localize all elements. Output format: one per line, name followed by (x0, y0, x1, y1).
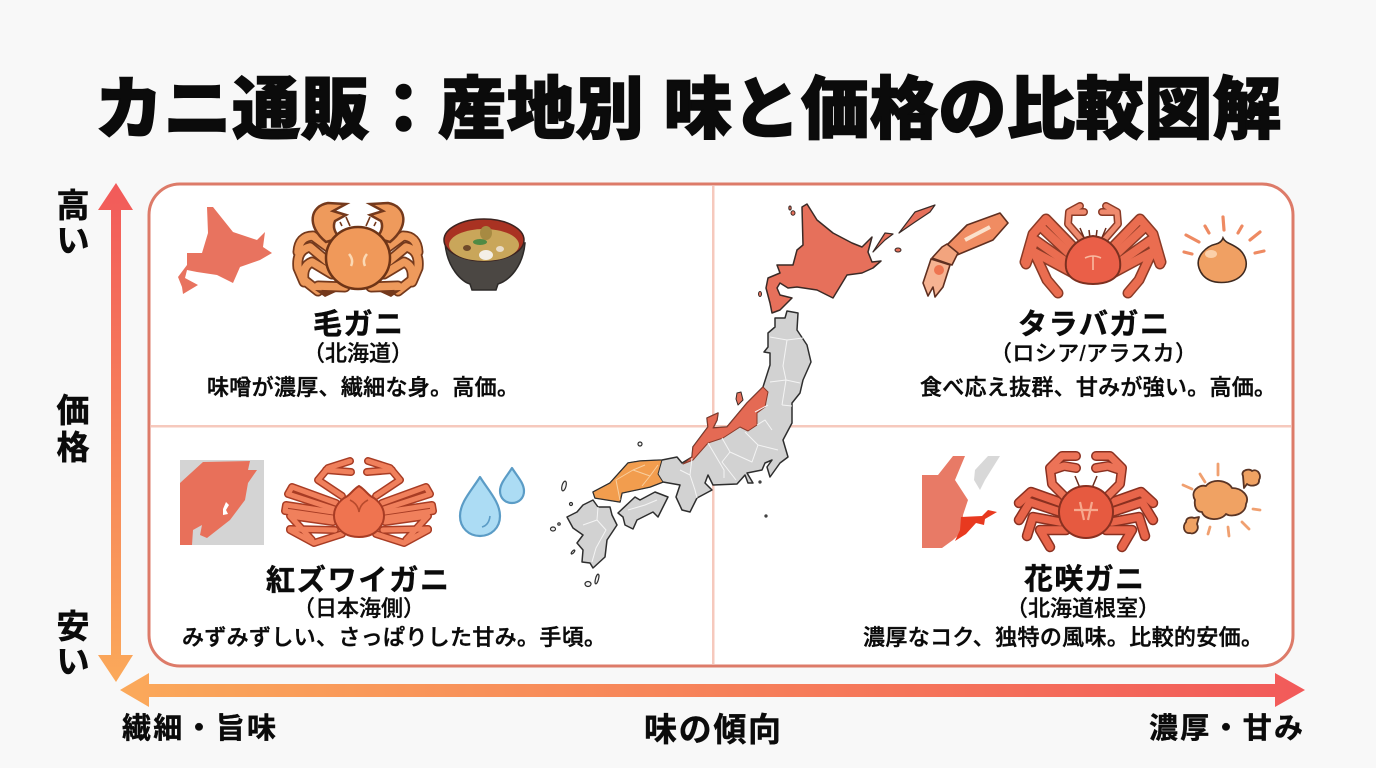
heading: kegani: 毛ガニ (313, 308, 403, 341)
Sea of Japan red region (683, 387, 768, 464)
origin: Sea of Japan side: （日本海側） (293, 596, 425, 621)
Honshu (593, 311, 811, 512)
icon: king crab (1025, 206, 1161, 293)
quadrant: benizuwai (bottom-left) (180, 460, 606, 650)
icon: Sea of Japan map (180, 460, 264, 545)
quadrant: kegani (top-left) (178, 203, 525, 400)
icon: hairy crab (298, 203, 418, 297)
vertical divider (712, 186, 714, 664)
heading: tarabagani: タラバガニ (1018, 308, 1169, 341)
axis label: rich sweet: 濃厚・甘み (1149, 712, 1303, 745)
panel: quadrant matrix (149, 184, 1293, 666)
horizontal divider (151, 425, 1291, 428)
quadrant: tarabagani (top-right) (920, 206, 1276, 400)
description: 食べ応え抜群、甘みが強い。高価。 (920, 375, 1276, 400)
axis label: price high: い (56, 222, 90, 259)
axis label: price: 格 (56, 429, 90, 466)
Shikoku (618, 492, 668, 529)
axis label: taste tendency: 味の傾向 (644, 711, 781, 748)
icon: miso soup bowl (444, 219, 525, 290)
arrow: price axis (98, 183, 133, 682)
description: みずみずしい、さっぱりした甘み。手頃。 (182, 625, 606, 650)
icon: water drops (460, 468, 524, 536)
icon: Hokkaido map (178, 207, 272, 294)
axis label: price low: い (56, 643, 90, 680)
Hokkaido (766, 204, 881, 313)
map: Japan centre (550, 204, 935, 586)
Kuril islands (873, 205, 935, 252)
small islands (550, 442, 767, 586)
origin: Russia/Alaska: （ロシア/アラスカ） (990, 341, 1197, 366)
icon: rich sweet flavour bun (1184, 217, 1264, 282)
axis label: price low: 安 (56, 608, 90, 645)
origin: Nemuro, Hokkaido: （北海道根室） (1006, 596, 1160, 621)
Chugoku orange region (593, 460, 663, 502)
heading: benizuwai: 紅ズワイガニ (266, 563, 449, 597)
axis label: price: 価 (56, 392, 90, 429)
icon: snow crab (285, 461, 433, 543)
Sado (736, 392, 743, 405)
icon: hanasaki crab (1019, 456, 1153, 547)
icon: crab leg (923, 213, 1008, 297)
Kyushu (567, 500, 617, 568)
prefecture lines (583, 337, 803, 562)
axis label: price low (56, 608, 90, 680)
quadrant: hanasaki (bottom-right) (863, 456, 1263, 650)
title: カニ通販：産地別 味と価格の比較図解 (95, 72, 1281, 148)
heading: hanasaki: 花咲ガニ (1024, 563, 1144, 596)
arrow: taste axis (120, 673, 1305, 707)
icon: Nemuro map (922, 456, 1000, 548)
axis label: price (56, 392, 90, 466)
icon: rich aroma cloud (1183, 464, 1260, 536)
origin: Hokkaido: （北海道） (303, 341, 413, 366)
axis label: price high: 高 (56, 187, 90, 224)
description: 濃厚なコク、独特の風味。比較的安価。 (863, 625, 1263, 650)
axis label: delicate umami: 繊細・旨味 (122, 712, 276, 745)
axis label: price high (56, 187, 90, 259)
description: 味噌が濃厚、繊細な身。高価。 (207, 375, 519, 400)
